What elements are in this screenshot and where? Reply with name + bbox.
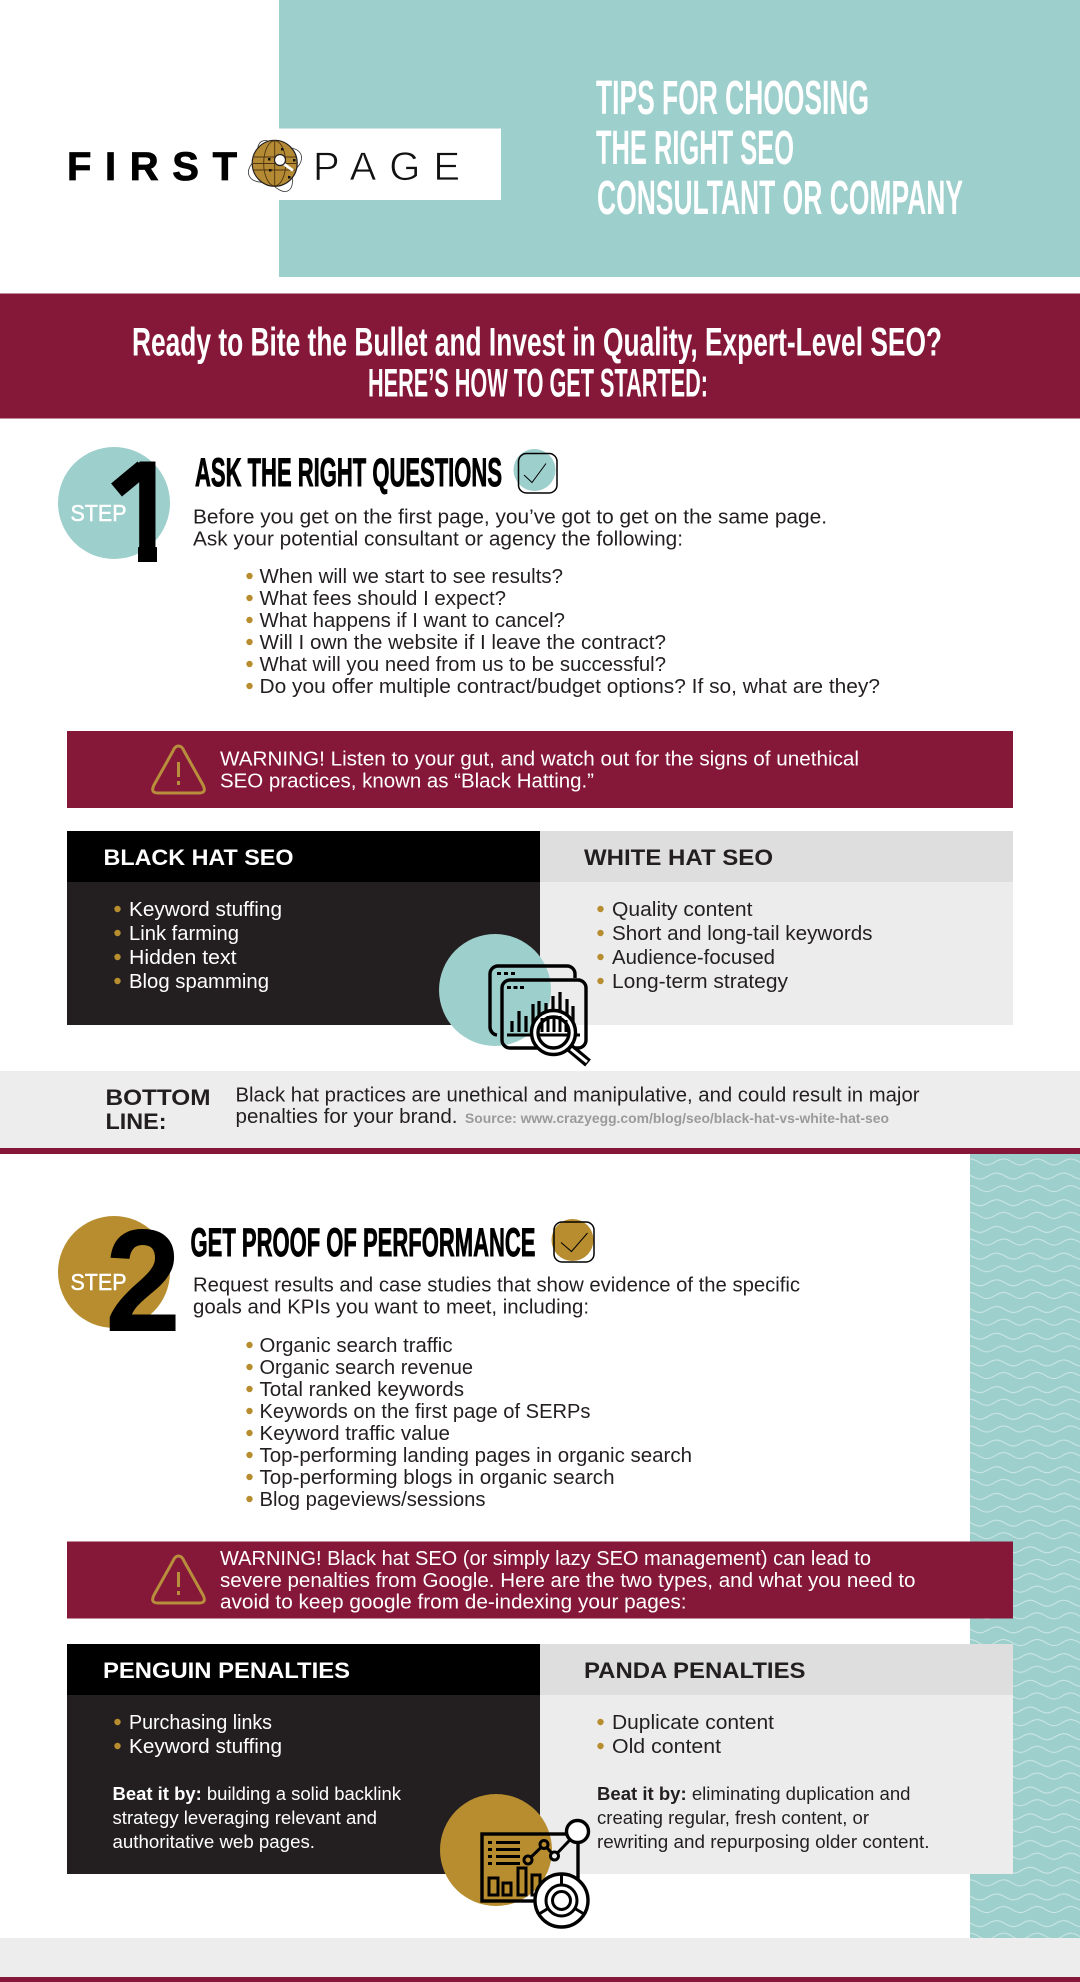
panel: penguin penalties: Purchasing links — [129, 1712, 272, 1734]
step 1 badge: STEP — [70, 500, 126, 526]
banner: HERE’S HOW TO GET STARTED: — [368, 362, 708, 406]
step 2 KPI list — [246, 1335, 692, 1511]
panel: white hat SEO: WHITE HAT SEO — [584, 845, 773, 870]
title — [596, 72, 963, 225]
step 2 KPI list: Organic search traffic — [260, 1335, 452, 1357]
panel: panda penalties: creating regular, fresh content, or — [597, 1808, 869, 1828]
step 2 badge: STEP — [70, 1269, 126, 1295]
logo: First Page: PAGE — [313, 145, 460, 189]
step 1 intro text: Before you get on the first page, you’ve got to get on the same page. — [193, 506, 827, 528]
step 2 heading: GET PROOF OF PERFORMANCE — [190, 1221, 536, 1265]
icon: warning triangle — [153, 746, 204, 793]
logo white plate — [279, 128, 501, 200]
step 1 question list: What will you need from us to be successful? — [260, 654, 666, 676]
panel: black hat SEO: Keyword stuffing — [129, 899, 282, 921]
step 2 KPI list: Keywords on the first page of SERPs — [260, 1401, 590, 1423]
bottom line band: penalties for your brand. — [236, 1106, 458, 1128]
bottom line band — [0, 1071, 1080, 1154]
step 1 question list: What happens if I want to cancel? — [260, 610, 565, 632]
bottom line band: LINE: — [106, 1109, 166, 1134]
panel: penguin penalties: PENGUIN PENALTIES — [103, 1658, 350, 1683]
step 1 intro text — [193, 506, 827, 550]
panel: penguin penalties: Keyword stuffing — [129, 1736, 282, 1758]
wave pattern side strip — [970, 1154, 1080, 1938]
panel: panda penalties — [540, 1644, 1013, 1874]
step 1 question list: Will I own the website if I leave the contract? — [260, 632, 666, 654]
step 1 intro text: Ask your potential consultant or agency the following: — [193, 528, 683, 550]
panel: black hat SEO: Blog spamming — [129, 971, 269, 993]
panel: penguin penalties — [67, 1644, 540, 1874]
icon: warning triangle — [153, 1556, 204, 1603]
step 2 badge: 2 — [105, 1199, 181, 1362]
title: THE RIGHT SEO — [596, 122, 794, 175]
warning 1 — [67, 731, 1013, 808]
warning 1: SEO practices, known as “Black Hatting.” — [220, 770, 594, 792]
panel: black hat SEO: Link farming — [129, 923, 239, 945]
logo: First Page — [67, 135, 460, 197]
step 2 intro text — [193, 1274, 800, 1318]
icon: globe with magnifier — [243, 135, 307, 197]
step 1 question list: Do you offer multiple contract/budget options? If so, what are they? — [260, 676, 880, 698]
warning 2: avoid to keep google from de-indexing your pages: — [220, 1592, 686, 1614]
panel: panda penalties: rewriting and repurposing older content. — [597, 1832, 930, 1852]
panel: white hat SEO: Audience-focused — [612, 947, 775, 969]
panel: penguin penalties: Beat it by: building a solid backlink — [112, 1784, 402, 1804]
banner — [0, 294, 1080, 418]
step 2 KPI list: Top-performing blogs in organic search — [260, 1467, 614, 1489]
step 2 KPI list: Keyword traffic value — [260, 1423, 450, 1445]
panel: penguin penalties: authoritative web pages. — [112, 1832, 315, 1852]
step 1 question list — [246, 566, 880, 698]
panel: white hat SEO: Long-term strategy — [612, 971, 788, 993]
warning 1: WARNING! Listen to your gut, and watch out for the signs of unethical — [220, 748, 859, 770]
step 2 intro text: Request results and case studies that show evidence of the specific — [193, 1274, 800, 1296]
footer band — [0, 1938, 1080, 1982]
panel: black hat SEO: BLACK HAT SEO — [104, 845, 294, 870]
panel: penguin penalties: strategy leveraging relevant and — [112, 1808, 377, 1828]
step 2 KPI list: Organic search revenue — [260, 1357, 473, 1379]
step 2 intro text: goals and KPIs you want to meet, including: — [193, 1296, 589, 1318]
panel: white hat SEO: Short and long-tail keywords — [612, 923, 872, 945]
step 2 KPI list: Total ranked keywords — [260, 1379, 464, 1401]
icon: teal checkbox — [514, 449, 557, 493]
step 2 KPI list: Top-performing landing pages in organic search — [260, 1445, 692, 1467]
warning 2 — [67, 1542, 1013, 1618]
step 1 heading: ASK THE RIGHT QUESTIONS — [195, 451, 502, 495]
logo: First Page: FIRST — [67, 145, 237, 189]
step 1 question list: When will we start to see results? — [260, 566, 563, 588]
title: TIPS FOR CHOOSING — [596, 72, 869, 125]
step 2 badge — [58, 1199, 181, 1362]
panel: panda penalties: Beat it by: eliminating duplication and — [597, 1784, 910, 1804]
step 1 badge: 1 — [112, 430, 178, 593]
step 2 KPI list: Blog pageviews/sessions — [260, 1489, 486, 1511]
panel: panda penalties: Duplicate content — [612, 1712, 774, 1734]
step 1 question list: What fees should I expect? — [260, 588, 506, 610]
bottom line band: Black hat practices are unethical and manipulative, and could result in major — [236, 1084, 920, 1106]
panel: black hat SEO: Hidden text — [129, 947, 237, 969]
icon: gold checkbox — [552, 1219, 594, 1262]
bottom line band: Source: www.crazyegg.com/blog/seo/black-hat-vs-white-hat-seo — [465, 1111, 889, 1126]
warning 2: severe penalties from Google. Here are the two types, and what you need to — [220, 1570, 916, 1592]
panel: white hat SEO: Quality content — [612, 899, 753, 921]
panel: black hat SEO — [67, 831, 540, 1025]
icon: dashboard report with target — [440, 1794, 588, 1927]
step 1 badge — [58, 447, 170, 562]
bottom line band: BOTTOM — [106, 1085, 210, 1110]
panel: panda penalties: PANDA PENALTIES — [584, 1658, 806, 1683]
warning 2: WARNING! Black hat SEO (or simply lazy SEO management) can lead to — [220, 1548, 871, 1570]
icon: analytics windows with magnifier — [439, 934, 588, 1063]
header teal panel — [279, 0, 1080, 277]
panel: white hat SEO — [540, 831, 1013, 1025]
panel: panda penalties: Old content — [612, 1736, 721, 1758]
